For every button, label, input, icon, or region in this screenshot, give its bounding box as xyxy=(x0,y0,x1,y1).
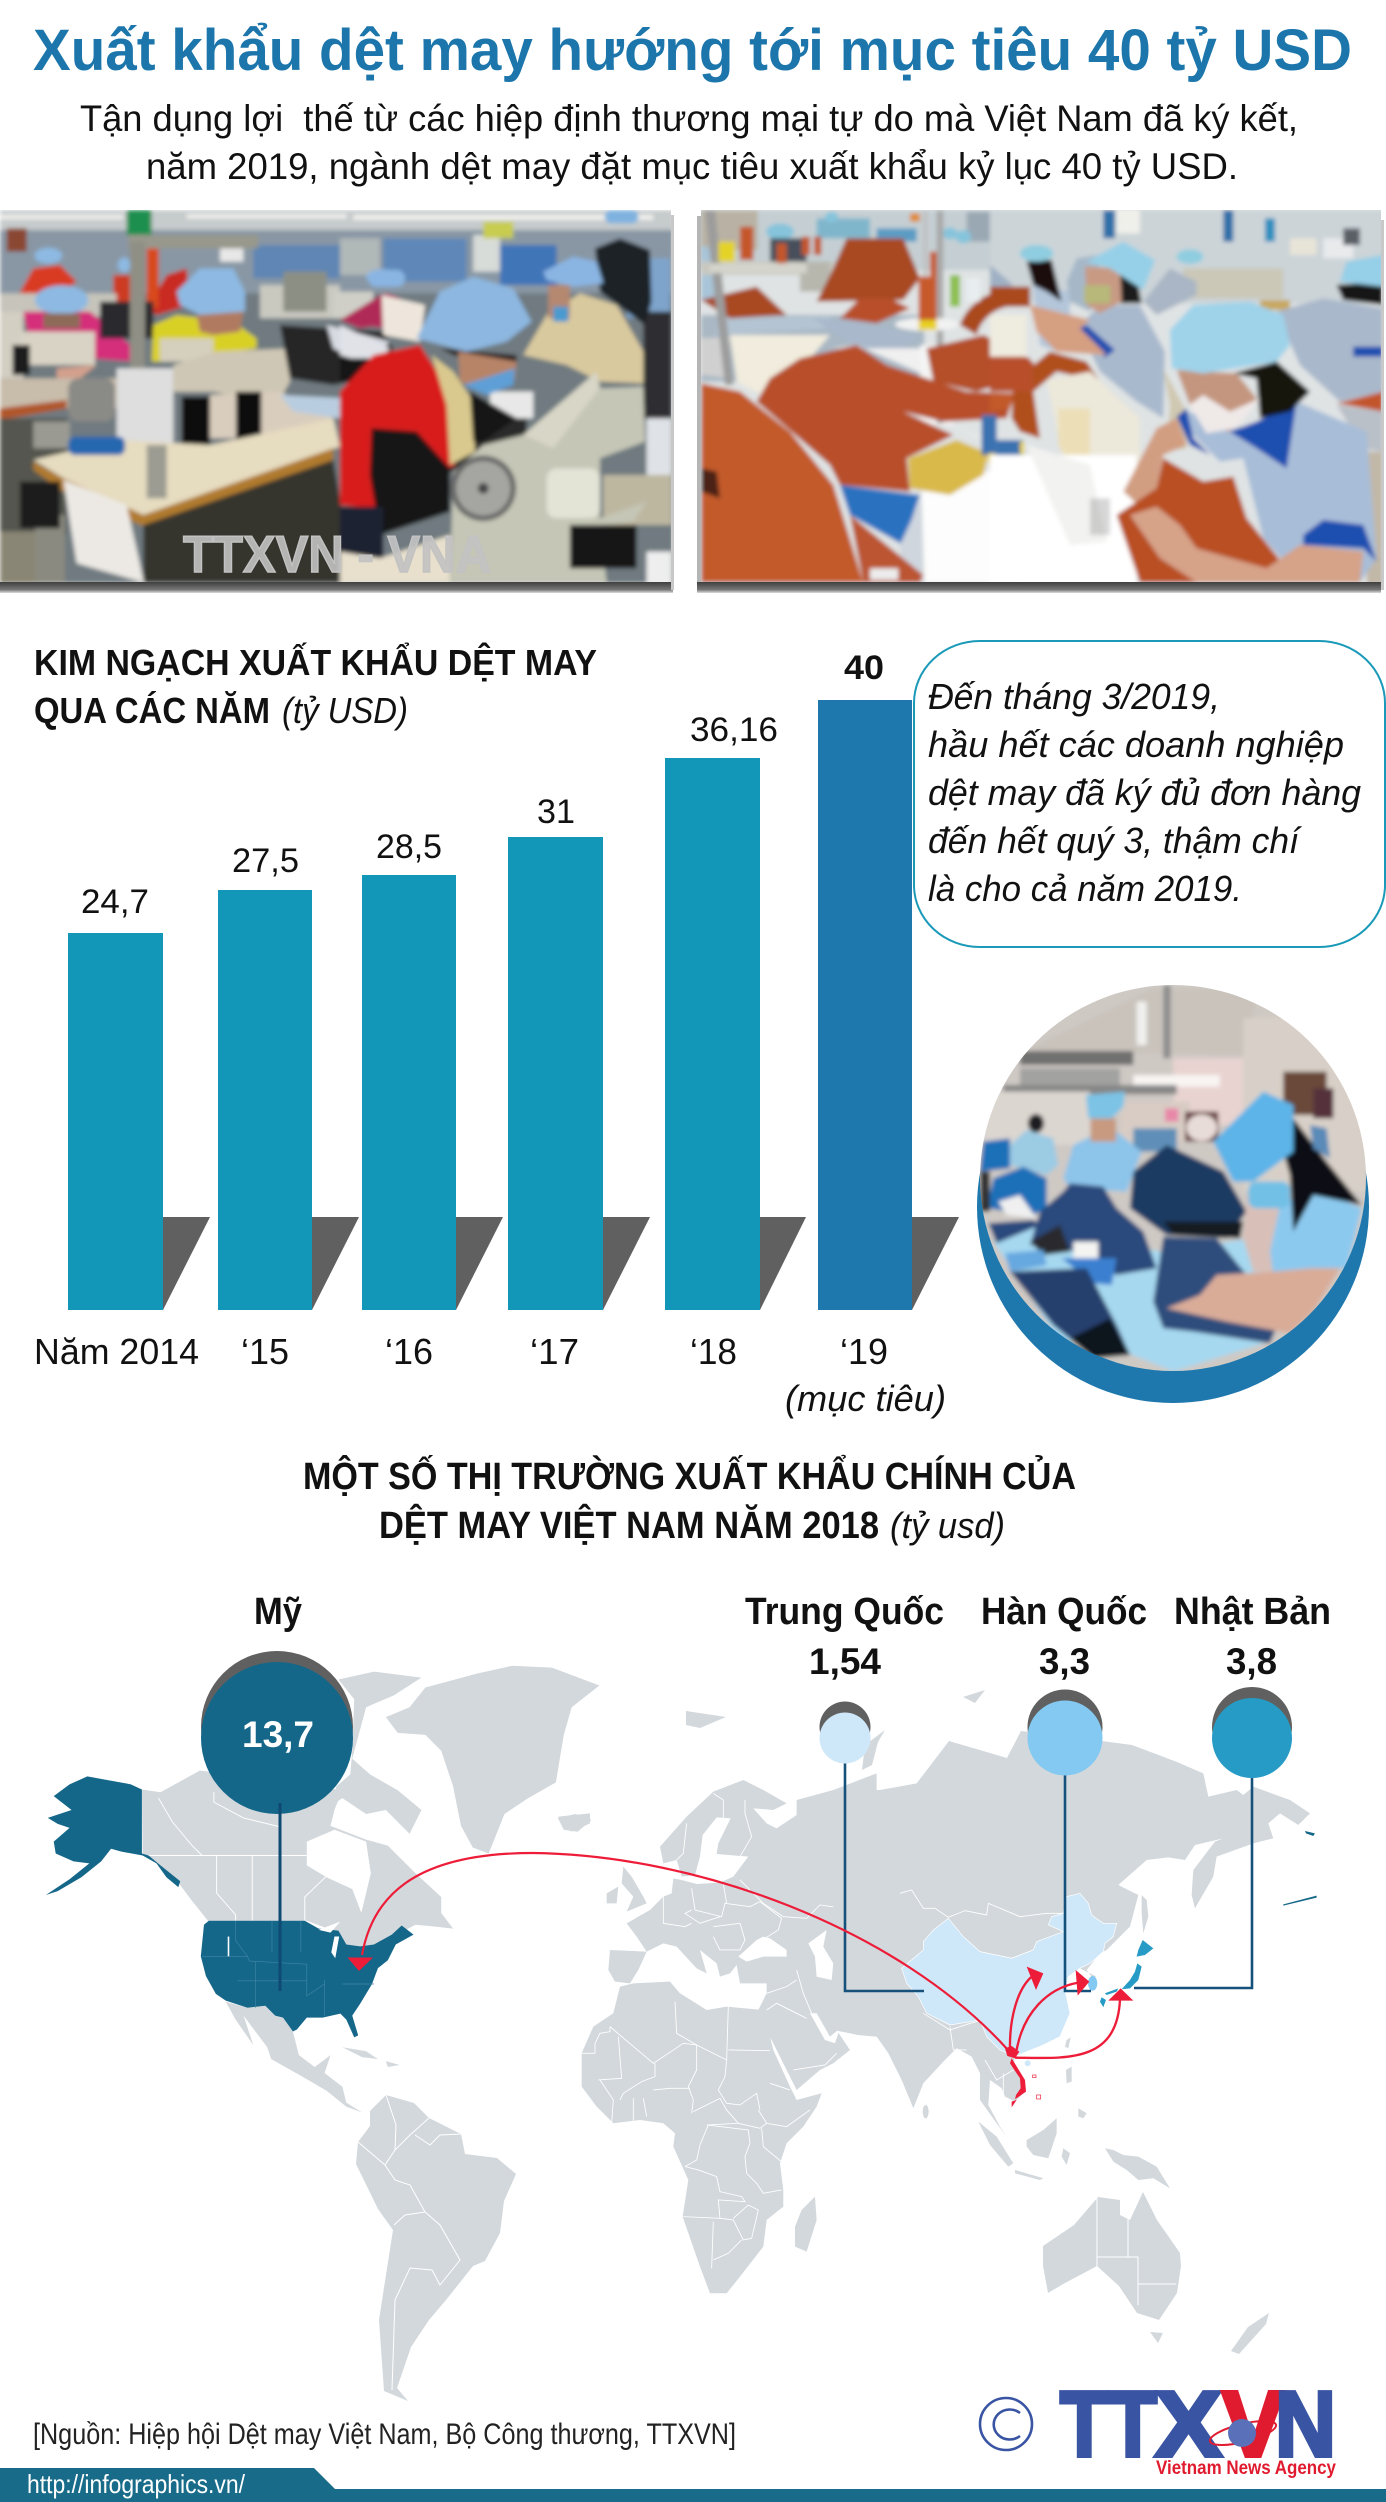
red arrows from Vietnam xyxy=(348,1853,1133,2107)
logo: TTXVN xyxy=(1060,2372,1336,2479)
bar values: 28,5 xyxy=(376,828,442,866)
chart heading: QUA CÁC NĂM xyxy=(34,690,270,731)
map: Europe, Africa, Middle East xyxy=(558,1773,948,2293)
map heading: (tỷ usd) xyxy=(890,1505,1005,1546)
arrow: to United States xyxy=(348,1853,1008,2050)
bar shadows xyxy=(163,1217,959,1310)
bar chart xyxy=(34,649,959,1419)
year labels: Năm 2014 xyxy=(34,1331,199,1372)
year labels: ‘16 xyxy=(385,1331,433,1372)
bar values: 40 xyxy=(844,649,884,687)
map heading: MỘT SỐ THỊ TRƯỜNG XUẤT KHẨU CHÍNH CỦA xyxy=(303,1453,1076,1498)
subtitle: năm 2019, ngành dệt may đặt mục tiêu xuất khẩu kỷ lục 40 tỷ USD. xyxy=(146,146,1238,187)
year labels: ‘19 xyxy=(840,1331,888,1372)
bar values: 31 xyxy=(537,793,575,831)
bubble: China: 1,54 xyxy=(809,1641,881,1682)
logo: TTXVN: Vietnam News Agency xyxy=(1156,2458,1336,2479)
map: South Korea xyxy=(1088,1976,1097,1991)
footer band xyxy=(0,2468,1386,2502)
title: Xuất khẩu dệt may hướng tới mục tiêu 40 tỷ USD xyxy=(33,18,1352,83)
bar values: 36,16 xyxy=(690,711,778,749)
bars xyxy=(68,700,912,1310)
map: Japan xyxy=(1100,1940,1153,2007)
world map xyxy=(46,1666,1317,2401)
bubble: United States xyxy=(201,1591,353,1991)
arrow: to Japan xyxy=(1015,1988,1133,2058)
callout: Đến tháng 3/2019, xyxy=(928,676,1220,717)
map: Vietnam xyxy=(1005,2046,1041,2107)
map: United States xyxy=(201,1921,414,2037)
logo: TTXVN: V xyxy=(1222,2372,1284,2476)
map: Americas xyxy=(46,1666,599,2113)
map heading xyxy=(303,1453,1076,1547)
year labels xyxy=(34,1331,946,1419)
callout: là cho cả năm 2019. xyxy=(928,868,1242,909)
bubble: China: Trung Quốc xyxy=(745,1591,944,1633)
watermark: TTXVN - VNA xyxy=(183,526,491,584)
bubble: South Korea: Hàn Quốc xyxy=(981,1591,1147,1633)
callout: hầu hết các doanh nghiệp xyxy=(928,724,1344,765)
arrow: to China xyxy=(1010,1967,1043,2050)
logo: TTXVN: X xyxy=(1155,2372,1222,2476)
connector lines xyxy=(845,1763,1252,1991)
map: South America xyxy=(356,2095,516,2401)
map heading: DỆT MAY VIỆT NAM NĂM 2018 xyxy=(379,1503,879,1547)
bar values: 24,7 xyxy=(81,883,149,921)
bubble: United States: Mỹ xyxy=(254,1591,302,1633)
bubble: South Korea: 3,3 xyxy=(1039,1641,1090,1682)
icon: copyright xyxy=(980,2398,1032,2450)
logo globe xyxy=(1208,2416,1278,2450)
map: Asia and Oceania xyxy=(833,1731,1317,2188)
map: China xyxy=(902,1893,1117,2057)
callout xyxy=(914,641,1385,947)
chart heading: KIM NGẠCH XUẤT KHẨU DỆT MAY xyxy=(34,641,597,683)
bubble: Japan xyxy=(1174,1591,1331,1778)
bubble: United States: 13,7 xyxy=(242,1714,314,1755)
photo: round image of workers folding navy garments xyxy=(973,982,1373,1403)
bar values xyxy=(81,649,884,921)
year labels: ‘15 xyxy=(241,1331,289,1372)
subtitle: Tận dụng lợi thế từ các hiệp định thương mại tự do mà Việt Nam đã ký kết, xyxy=(80,98,1298,139)
source note: [Nguồn: Hiệp hội Dệt may Việt Nam, Bộ Công thương, TTXVN] xyxy=(33,2418,736,2451)
map: Alaska xyxy=(46,1776,180,1895)
arrow: to South Korea xyxy=(1017,1970,1089,2050)
year labels: ‘17 xyxy=(530,1331,579,1372)
chart heading: (tỷ USD) xyxy=(282,690,408,731)
bar values: 27,5 xyxy=(232,842,299,880)
chart heading xyxy=(34,641,597,731)
year labels: ‘18 xyxy=(690,1331,737,1372)
map: Hawaii and US islands xyxy=(1283,1831,1317,1906)
bubble: South Korea xyxy=(981,1591,1147,1776)
year labels: (mục tiêu) xyxy=(785,1378,946,1419)
bubble: Japan: Nhật Bản xyxy=(1174,1591,1331,1633)
logo: TTXVN: N xyxy=(1275,2372,1336,2476)
subtitle xyxy=(80,98,1298,187)
bubble: Japan: 3,8 xyxy=(1226,1641,1277,1682)
bubble: China xyxy=(745,1591,944,1764)
photo: orange fabric sewing line xyxy=(690,205,1386,593)
callout: dệt may đã ký đủ đơn hàng xyxy=(928,772,1361,813)
map: Arctic islands and Oceania xyxy=(686,1690,1269,2354)
logo: TTXVN: TT xyxy=(1060,2372,1157,2476)
photo: garment workers at sewing machines xyxy=(0,210,674,593)
footer band: http://infographics.vn/ xyxy=(27,2469,246,2499)
callout: đến hết quý 3, thậm chí xyxy=(928,820,1302,861)
